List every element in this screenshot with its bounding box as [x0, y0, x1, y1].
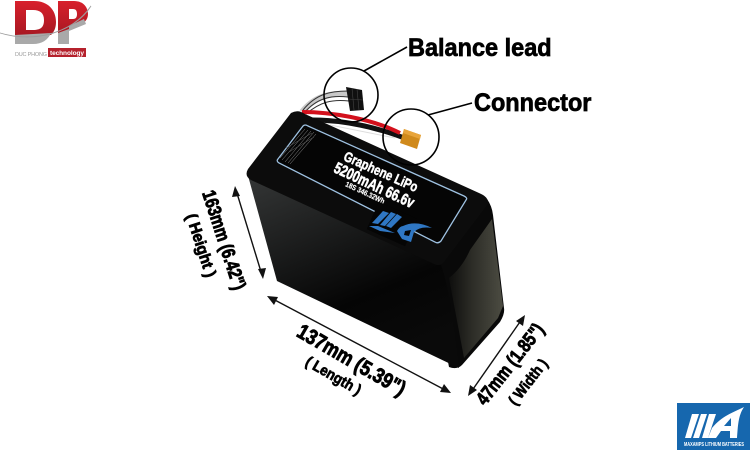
balance lead plug [346, 87, 364, 111]
length value: 137mm (5.39") [293, 320, 410, 401]
battery pack [247, 87, 504, 368]
callout circle: balance lead [324, 68, 378, 122]
arrow: length [267, 296, 451, 393]
heading: Connector: Connector [474, 89, 592, 117]
length caption: ( Length ) [302, 354, 364, 399]
logo: DP technology [0, 1, 91, 58]
label line 3: 18S 346.32Wh [344, 181, 386, 206]
XT connector [400, 129, 421, 149]
width caption: ( Width ) [506, 356, 552, 409]
side face [436, 199, 504, 368]
dimension: length [293, 320, 410, 401]
width value: 47mm (1.85") [471, 319, 548, 409]
MA logo on label [367, 202, 432, 246]
callout circle: connector [383, 109, 439, 165]
height caption: ( Height ) [182, 212, 219, 280]
logo: MaxAmps [677, 403, 750, 450]
logo swoosh [0, 6, 91, 37]
leader line: connector [428, 103, 472, 115]
logo letters DP [15, 1, 88, 44]
label line 1: Graphene LiPo [341, 149, 420, 195]
logo technology tag: technology [50, 50, 84, 57]
heading: Balance lead: Balance lead [408, 34, 552, 62]
dimension: height [182, 187, 251, 293]
arrow: height [232, 186, 266, 279]
wires [302, 91, 412, 141]
height value: 163mm (6.42") [198, 187, 251, 293]
dimension: width [471, 319, 552, 409]
logo mark [685, 407, 744, 438]
label text [331, 149, 420, 211]
front face [247, 172, 459, 368]
top face [247, 111, 488, 265]
label line 2: 5200mAh 66.6v [331, 158, 418, 211]
label outline [277, 125, 467, 243]
label fine print [280, 129, 316, 164]
leader line: balance lead [364, 47, 407, 71]
arrow: width [468, 315, 525, 396]
logo company name: DUC PHONG [15, 52, 47, 58]
